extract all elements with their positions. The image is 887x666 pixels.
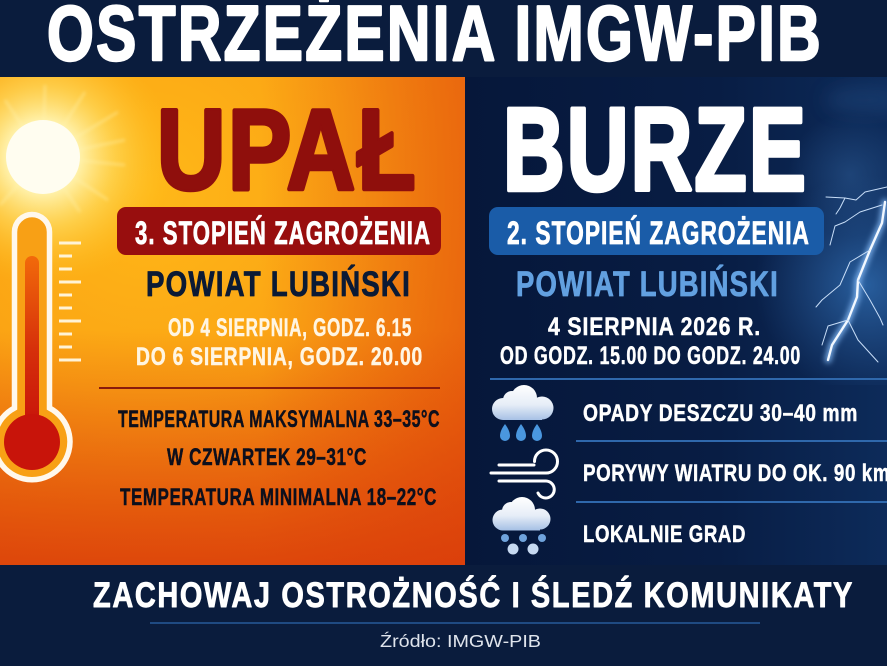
temperatures: TEMPERATURA MINIMALNA 18–22°C: [120, 484, 437, 511]
icon: sun: [0, 85, 125, 212]
temperatures: TEMPERATURA MAKSYMALNA 33–35°C: [118, 406, 440, 433]
county: upał: POWIAT LUBIŃSKI: [146, 264, 411, 304]
dates: burze: 4 SIERPNIA 2026 R.: [548, 313, 761, 341]
temperatures: [118, 406, 440, 511]
lower heat shading: [0, 330, 465, 565]
panel background: storm: [726, 77, 887, 565]
panel: upał: [0, 77, 465, 565]
dates: upał: [137, 318, 422, 370]
icon: thermometer: [0, 214, 81, 480]
badge: 3rd degree: [117, 207, 441, 255]
right heat shading: [291, 77, 465, 520]
panel background: heat: [0, 77, 465, 565]
lightning glow: [769, 197, 887, 378]
badge: 3rd degree: 3. STOPIEŃ ZAGROŻENIA: [135, 215, 431, 251]
icon: wind: [491, 450, 558, 498]
panel: burze: [465, 77, 887, 565]
hail row label: LOKALNIE GRAD: [583, 521, 746, 548]
footer band: [0, 565, 887, 666]
icon: lightning: [816, 187, 887, 362]
dates: burze: [500, 317, 800, 364]
icon: hail cloud: [492, 497, 550, 554]
county: burze: POWIAT LUBIŃSKI: [516, 264, 779, 304]
sun glow: [0, 77, 150, 264]
temperatures: W CZWARTEK 29–31°C: [167, 444, 367, 471]
badge: 2nd degree: [489, 207, 824, 255]
source: Źródło: IMGW-PIB: [380, 631, 541, 651]
heading: upał: UPAŁ: [157, 87, 418, 214]
dates: upał: OD 4 SIERPNIA, GODZ. 6.15: [168, 314, 412, 342]
storm clouds: [802, 86, 887, 216]
icon: rain cloud: [492, 385, 554, 441]
dates: upał: DO 6 SIERPNIA, GODZ. 20.00: [136, 343, 423, 371]
header band: [0, 0, 887, 77]
